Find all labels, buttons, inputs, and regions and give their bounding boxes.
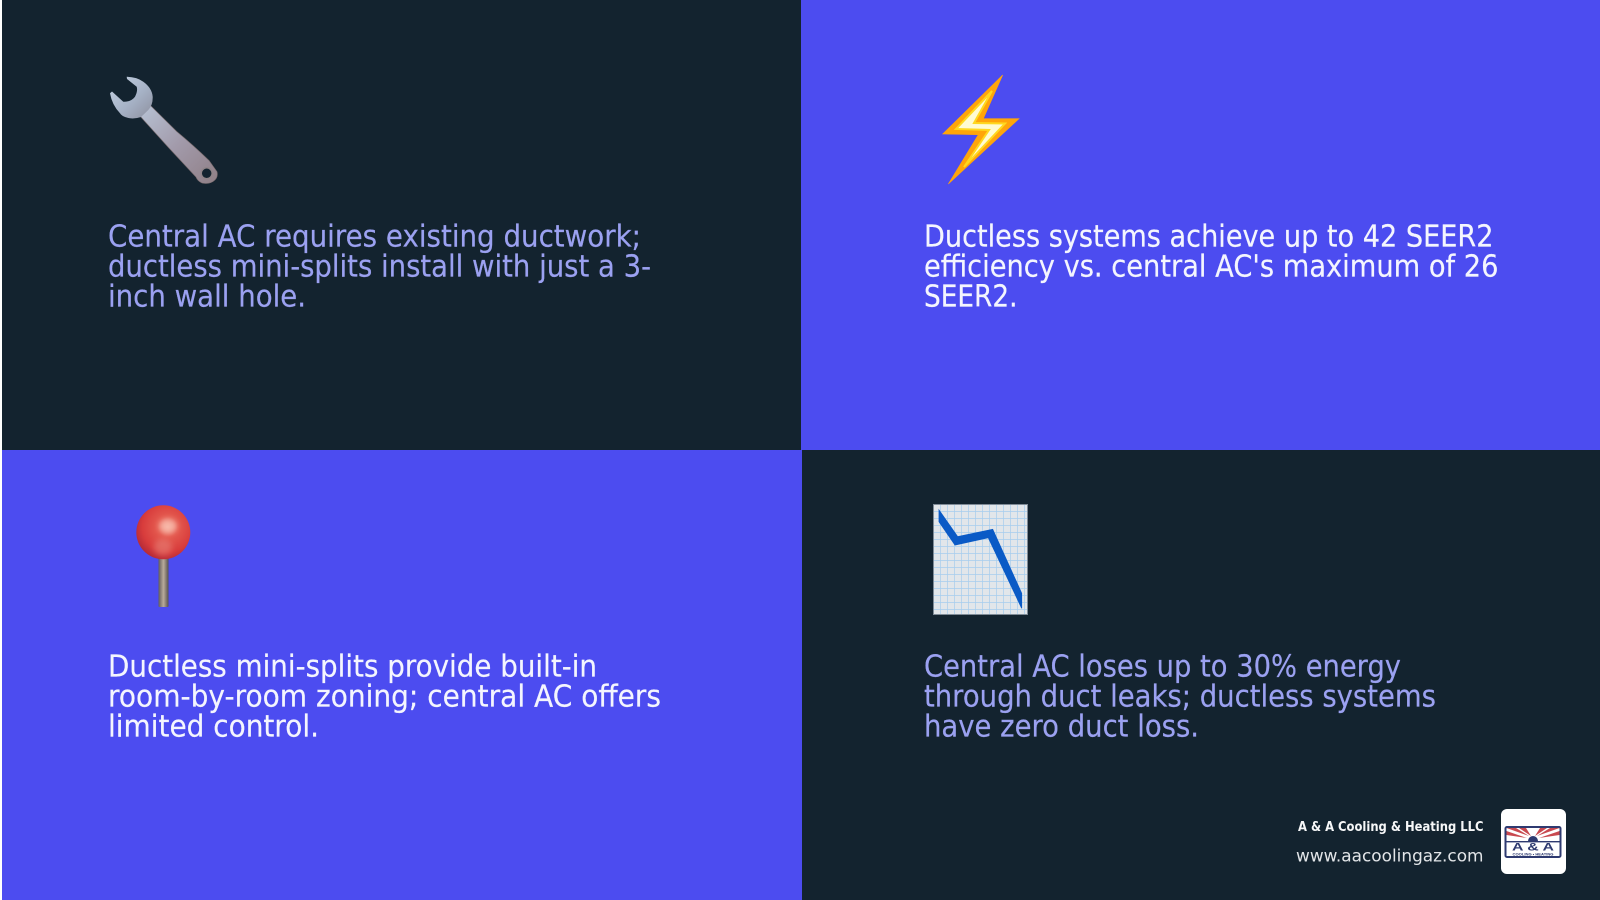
text: installation: Central AC requires existing ductwork; (108, 219, 641, 254)
text: efficiency: SEER2. (924, 279, 1018, 314)
text: zoning: Ductless mini-splits provide built-in (108, 649, 597, 684)
text: installation: inch wall hole. (108, 279, 306, 314)
icon: pushpin (136, 505, 190, 607)
text: energy loss (924, 649, 1436, 744)
text: efficiency: Ductless systems achieve up to 42 SEER2 (924, 219, 1494, 254)
brand block (1296, 809, 1566, 874)
icon: declining chart (934, 504, 1028, 614)
text: efficiency: efficiency vs. central AC's maximum of 26 (924, 249, 1498, 284)
text: efficiency (924, 219, 1498, 314)
text: zoning: limited control. (108, 709, 319, 744)
panel: energy loss (802, 450, 1600, 900)
text: energy loss: have zero duct loss. (924, 709, 1199, 744)
text: zoning: room-by-room zoning; central AC offers (108, 679, 661, 714)
logo: COOLING • HEATING (1512, 852, 1554, 856)
icon: wrench (110, 77, 217, 184)
icon: lightning bolt (943, 75, 1019, 184)
panel: zoning (2, 450, 802, 900)
text: installation (108, 219, 651, 314)
panel: efficiency (801, 0, 1600, 450)
logo: A & A (1512, 842, 1554, 854)
text: energy loss: Central AC loses up to 30% energy (924, 649, 1401, 684)
website: www.aacoolingaz.com (1296, 846, 1484, 866)
company name: A & A Cooling & Heating LLC (1298, 820, 1484, 835)
text: installation: ductless mini-splits install with just a 3- (108, 249, 651, 284)
text: energy loss: through duct leaks; ductless systems (924, 679, 1436, 714)
logo (1501, 809, 1566, 874)
panel: installation (2, 0, 801, 450)
text: zoning (108, 649, 661, 744)
